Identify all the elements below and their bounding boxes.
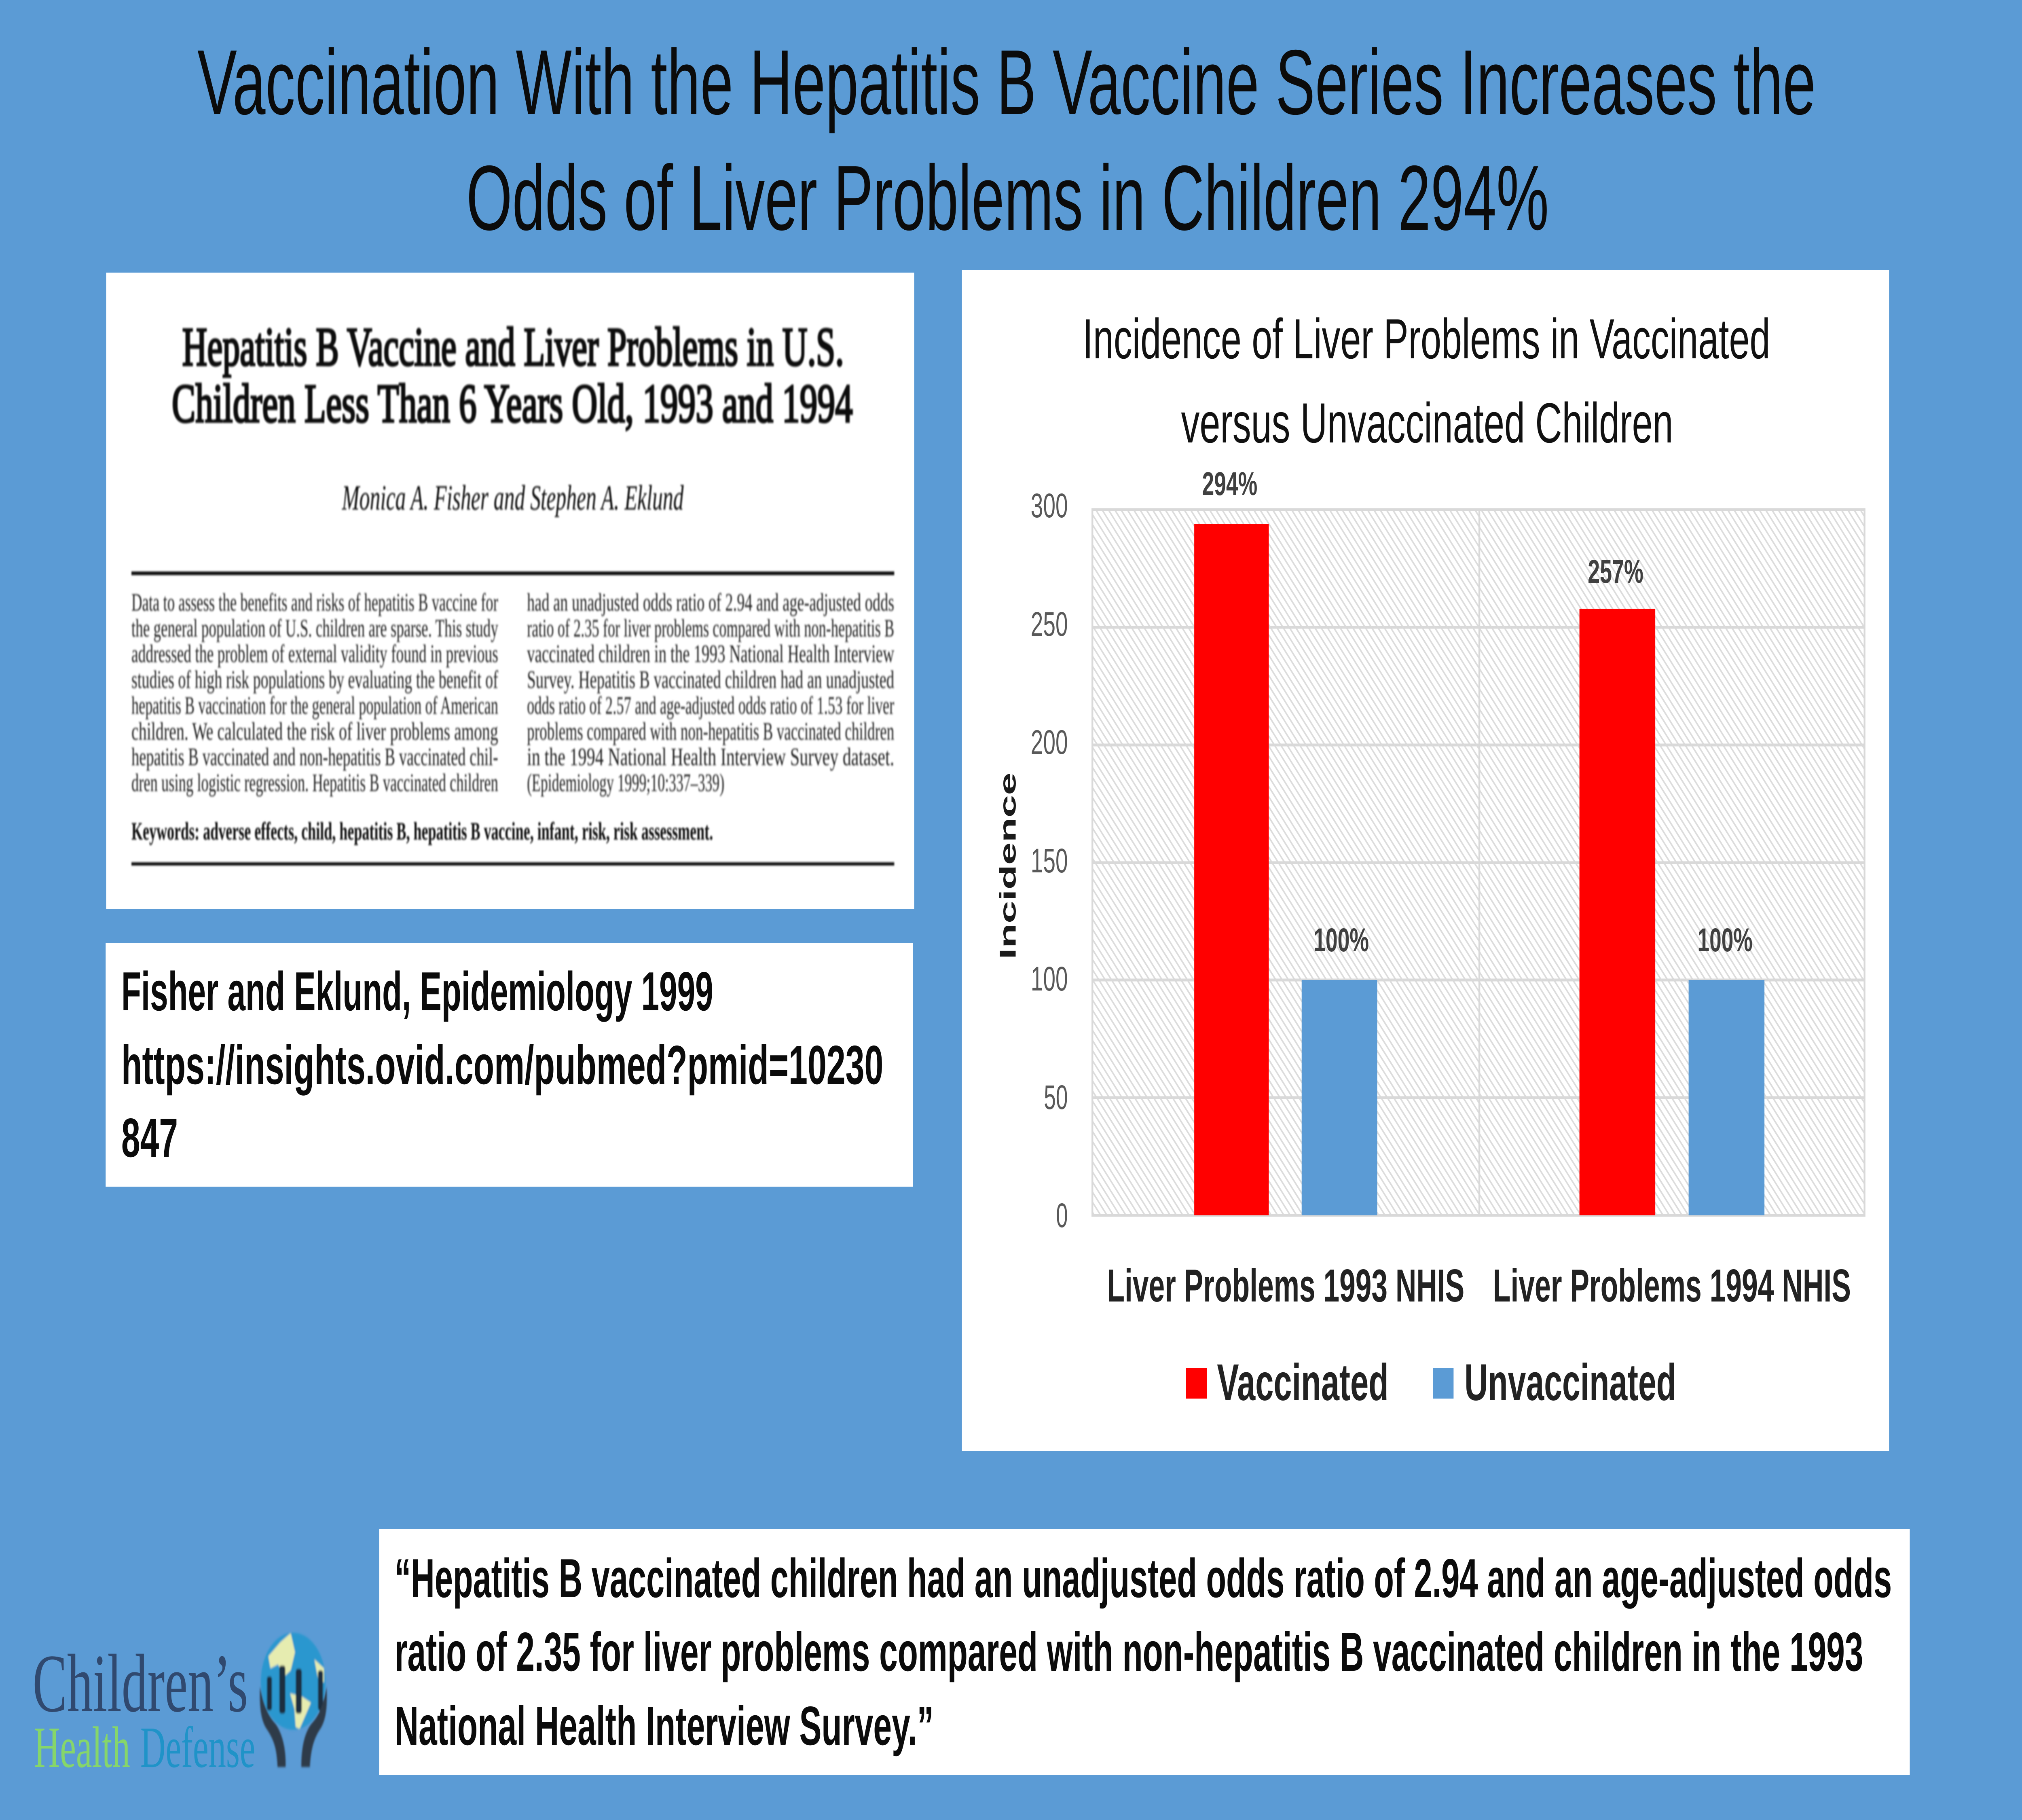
chart title: versus Unvaccinated Children	[1181, 391, 1673, 455]
article heading	[172, 316, 853, 434]
abstract column one: addressed the problem of external validity found in previous	[131, 640, 498, 668]
bar: vaccinated 1994	[1580, 609, 1655, 1215]
data labels: 100%	[1698, 922, 1753, 959]
title: Vaccination With the Hepatitis B Vaccine Series Increases the	[197, 31, 1816, 134]
keywords: Keywords: adverse effects, child, hepatitis B, hepatitis B vaccine, infant, risk, risk assessment.	[131, 818, 713, 845]
top rule	[131, 571, 894, 575]
logo wordmark: Defense	[140, 1715, 255, 1780]
quotation text: “Hepatitis B vaccinated children had an unadjusted odds ratio of 2.94 and an age-adjusted odds	[395, 1548, 1892, 1609]
citation text: 847	[121, 1107, 178, 1169]
globe	[261, 1633, 326, 1730]
y axis tick labels: 100	[1031, 960, 1068, 998]
article heading: Hepatitis B Vaccine and Liver Problems in U.S.	[182, 316, 844, 377]
abstract column two: ratio of 2.35 for liver problems compared with non-hepatitis B	[527, 614, 894, 642]
article authors: Monica A. Fisher and Stephen A. Eklund	[342, 478, 684, 517]
y axis tick labels	[1031, 487, 1068, 1234]
data labels: 257%	[1588, 553, 1643, 590]
abstract column two: in the 1994 National Health Interview Survey dataset.	[527, 743, 894, 771]
y axis tick labels: 300	[1031, 487, 1068, 525]
abstract column two	[527, 588, 895, 797]
y axis tick labels: 250	[1031, 605, 1068, 643]
data labels: 294%	[1202, 466, 1257, 502]
title: Odds of Liver Problems in Children 294%	[466, 147, 1549, 250]
legend	[1186, 1353, 1676, 1412]
category labels: Liver Problems 1993 NHIS	[1107, 1260, 1464, 1312]
abstract column two: problems compared with non-hepatitis B vaccinated children	[527, 717, 894, 745]
logo: Children's Health Defense	[33, 1633, 327, 1780]
panel: citation	[106, 943, 913, 1187]
legend: Unvaccinated	[1464, 1353, 1676, 1412]
abstract column one: hepatitis B vaccination for the general population of American	[131, 692, 498, 720]
abstract column one: hepatitis B vaccinated and non-hepatitis B vaccinated chil-	[131, 743, 498, 771]
panel: quotation	[379, 1529, 1910, 1775]
abstract column one: studies of high risk populations by evaluating the benefit of	[131, 666, 498, 694]
data labels: 100%	[1313, 922, 1369, 959]
title	[197, 31, 1816, 250]
category labels: Liver Problems 1994 NHIS	[1493, 1260, 1851, 1312]
bottom rule	[131, 862, 894, 866]
abstract column one: children. We calculated the risk of liver problems among	[131, 717, 498, 745]
bar: unvaccinated 1994	[1689, 980, 1764, 1215]
quotation text: National Health Interview Survey.”	[395, 1695, 934, 1757]
y axis tick labels: 200	[1031, 723, 1068, 761]
logo wordmark: Children’s	[33, 1638, 248, 1729]
icon: globe in hands	[260, 1633, 327, 1767]
hands	[260, 1687, 286, 1767]
abstract column one: dren using logistic regression. Hepatitis B vaccinated children	[131, 769, 498, 797]
people silhouettes	[267, 1666, 323, 1714]
bar: vaccinated 1993	[1194, 524, 1269, 1215]
abstract column one	[131, 588, 498, 797]
chart title: Incidence of Liver Problems in Vaccinated	[1083, 307, 1770, 370]
bar: unvaccinated 1993	[1302, 980, 1377, 1215]
article text	[131, 316, 895, 866]
citation text	[121, 961, 883, 1169]
chart title	[1083, 307, 1770, 455]
citation text: Fisher and Eklund, Epidemiology 1999	[121, 961, 713, 1022]
logo wordmark: Health	[34, 1715, 130, 1780]
abstract column two: had an unadjusted odds ratio of 2.94 and age-adjusted odds	[527, 588, 894, 616]
panel: bar chart	[962, 270, 1889, 1451]
abstract column two: vaccinated children in the 1993 National Health Interview	[527, 640, 894, 668]
continents	[269, 1633, 324, 1729]
data labels	[1202, 466, 1753, 959]
y axis tick labels: 0	[1056, 1196, 1068, 1234]
quotation text	[395, 1548, 1892, 1757]
abstract column one: the general population of U.S. children are sparse. This study	[131, 614, 498, 642]
y axis tick labels: 150	[1031, 842, 1068, 880]
category labels	[1107, 1260, 1851, 1312]
abstract column two: (Epidemiology 1999;10:337–339)	[527, 769, 724, 797]
quotation text: ratio of 2.35 for liver problems compared with non-hepatitis B vaccinated children in the 1993	[395, 1621, 1863, 1683]
citation text: https://insights.ovid.com/pubmed?pmid=10230	[121, 1035, 883, 1096]
abstract column two: odds ratio of 2.57 and age-adjusted odds ratio of 1.53 for liver	[527, 692, 895, 720]
y axis title: Incidence	[995, 772, 1020, 959]
legend: Vaccinated	[1217, 1353, 1389, 1412]
abstract column one: Data to assess the benefits and risks of hepatitis B vaccine for	[131, 588, 498, 616]
abstract column two: Survey. Hepatitis B vaccinated children had an unadjusted	[527, 666, 894, 694]
plot area	[1092, 510, 1865, 1215]
article heading: Children Less Than 6 Years Old, 1993 and 1994	[172, 373, 853, 434]
panel: journal article excerpt	[106, 273, 914, 909]
y axis tick labels: 50	[1044, 1078, 1068, 1116]
logo wordmark	[33, 1638, 255, 1780]
